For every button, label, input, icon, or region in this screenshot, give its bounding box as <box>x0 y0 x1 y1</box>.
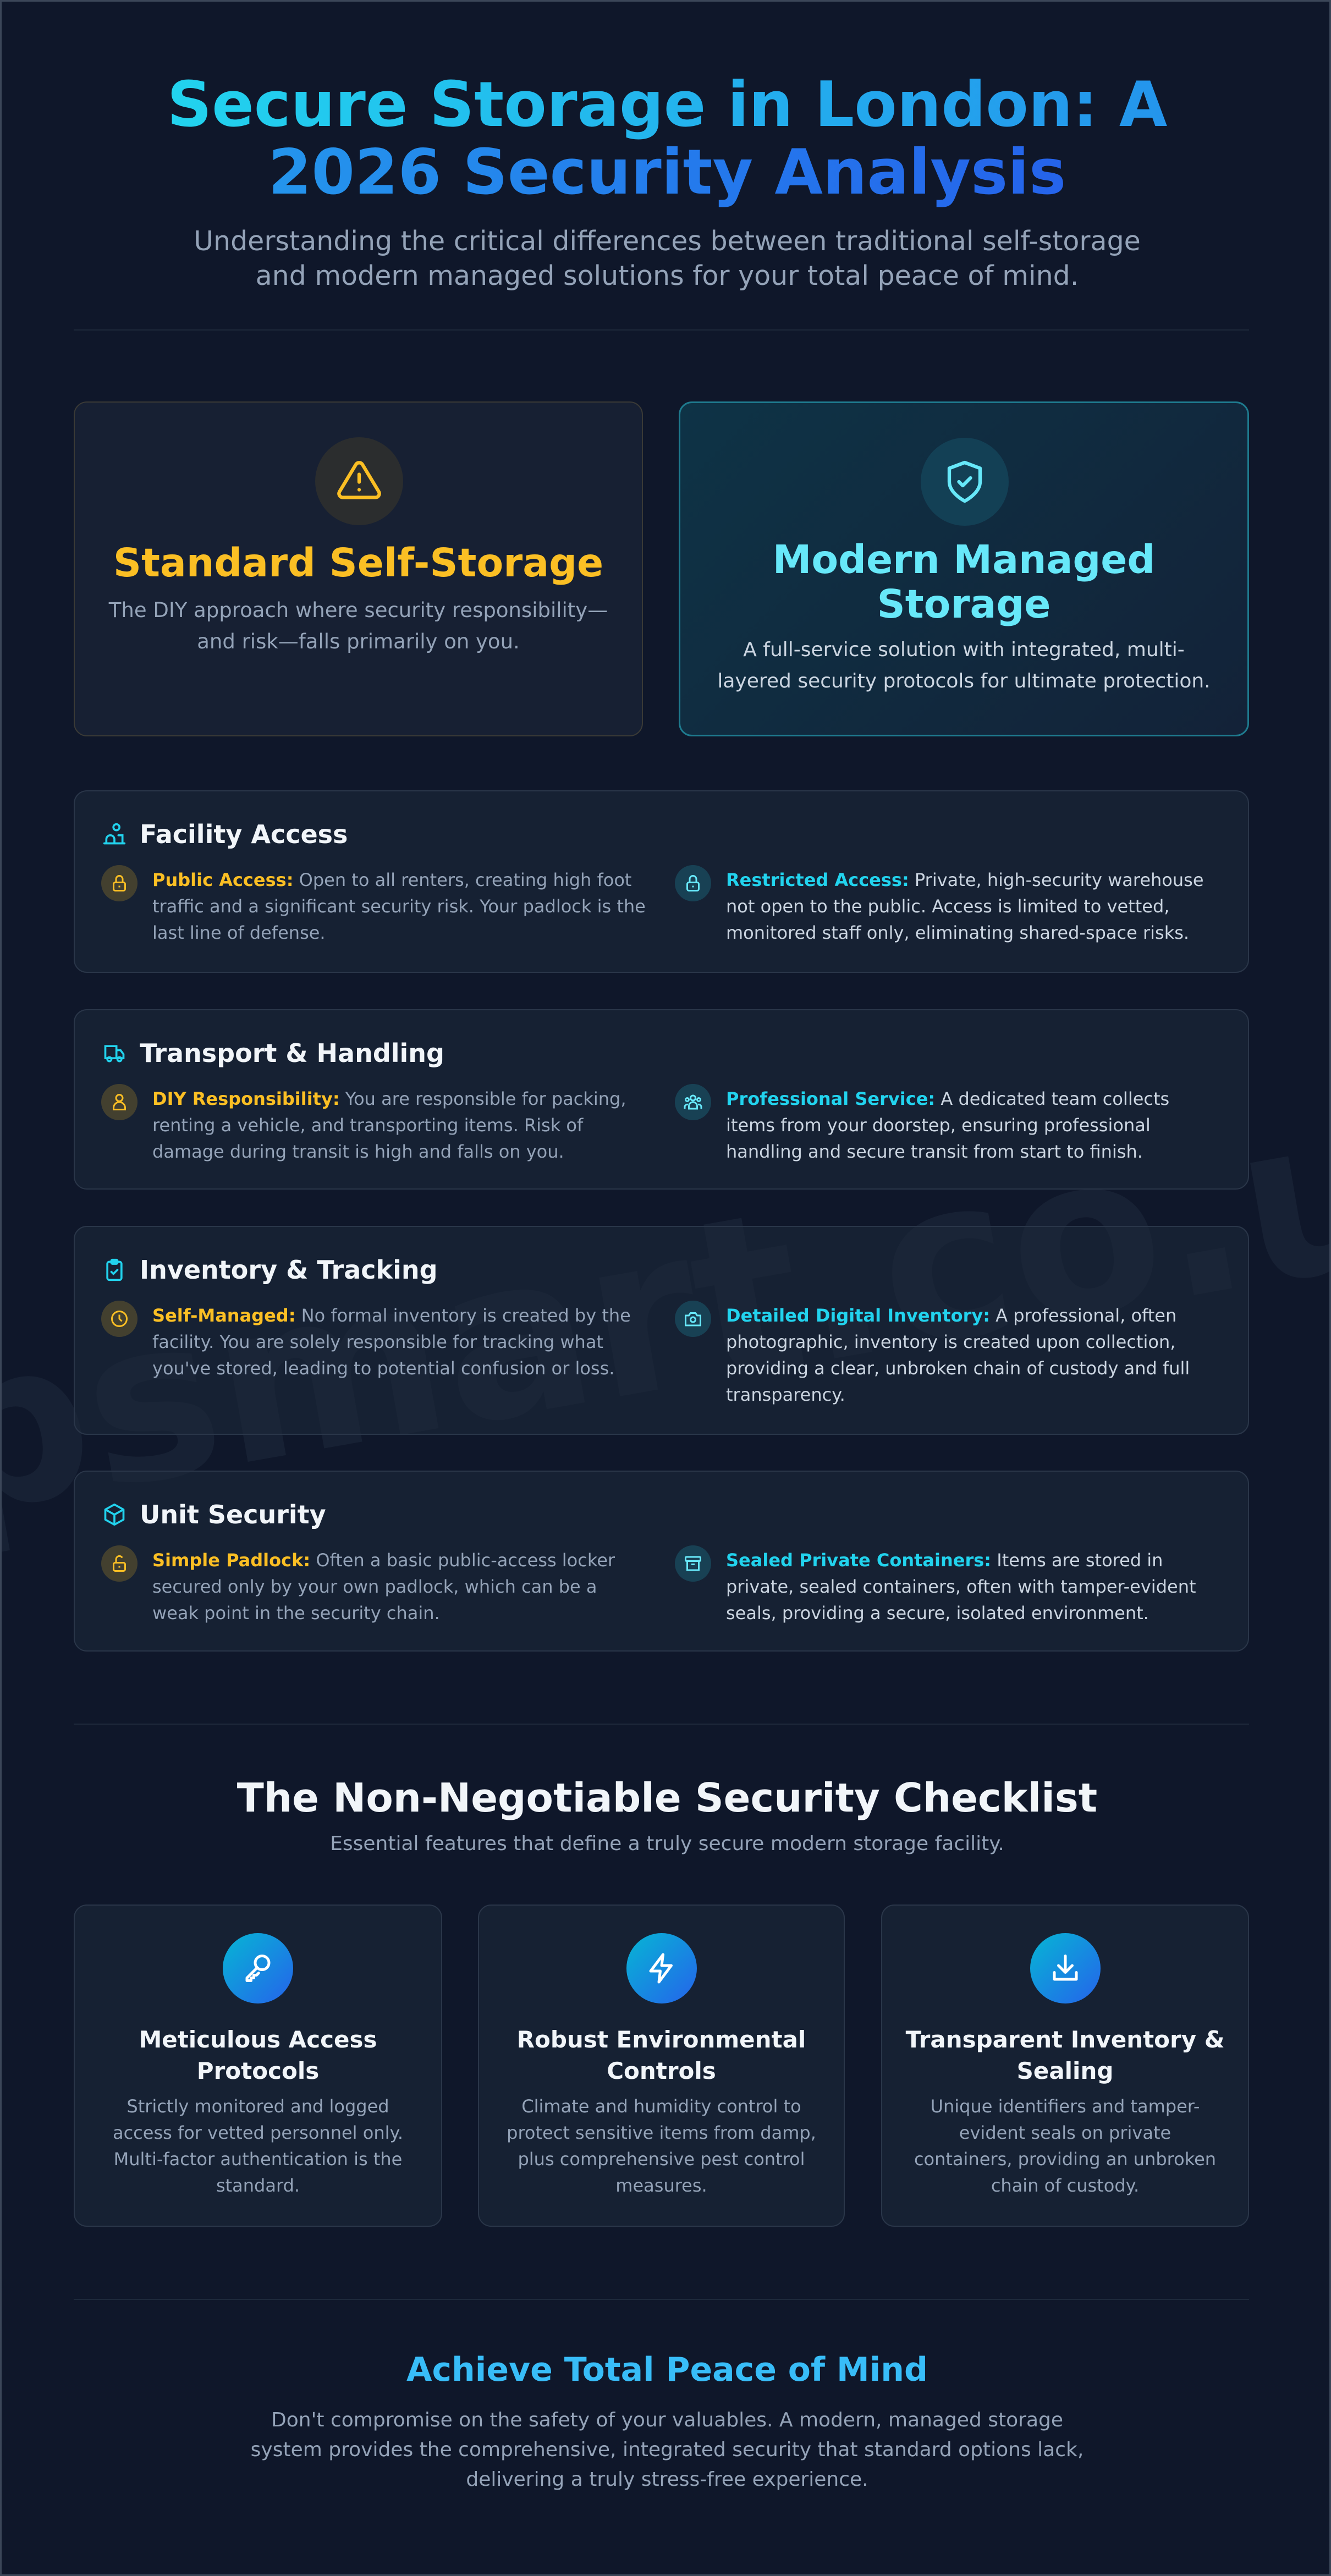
closing text: Don't compromise on the safety of your valuables. A modern, managed storage <box>271 2409 1063 2431</box>
icon: access <box>103 823 125 845</box>
card: inventory & sealing: Sealing <box>1017 2057 1113 2084</box>
panel: inventory & tracking: transparency. <box>726 1384 845 1405</box>
heading: Standard Self-Storage <box>113 540 603 586</box>
panel: inventory & tracking <box>74 1226 1249 1435</box>
card: environmental controls: Climate and humidity control to <box>521 2096 801 2117</box>
panel: unit security: secured only by your own padlock, which can be a <box>152 1576 597 1597</box>
card: inventory & sealing <box>881 1905 1249 2227</box>
icon: shield <box>921 438 1009 526</box>
description: layered security protocols for ultimate protection. <box>717 670 1211 692</box>
checklist subtitle: Essential features that define a truly secure modern storage facility. <box>330 1832 1004 1855</box>
card: access protocols: access for vetted personnel only. <box>113 2122 403 2143</box>
panel: inventory & tracking: you've stored, leading to potential confusion or loss. <box>152 1358 614 1379</box>
subtitle: Understanding the critical differences between traditional self-storage <box>194 225 1141 257</box>
closing text: system provides the comprehensive, integrated security that standard options lack, <box>251 2439 1084 2461</box>
card: inventory & sealing: containers, providing an unbroken <box>914 2149 1216 2170</box>
card: environmental controls: Robust Environmental <box>517 2026 806 2053</box>
panel: transport & handling <box>74 1009 1249 1190</box>
icon: download <box>1030 1933 1100 2003</box>
description: The DIY approach where security responsibility— <box>109 598 608 622</box>
panel: inventory & tracking: Self-Managed: No formal inventory is created by the <box>152 1305 631 1326</box>
icon: truck <box>105 1045 124 1063</box>
item: diy <box>101 1084 138 1120</box>
card: inventory & sealing: Transparent Inventory & <box>906 2026 1224 2053</box>
card: environmental controls: Controls <box>607 2057 716 2084</box>
icon: warning <box>315 437 403 525</box>
item: restricted access <box>675 865 711 901</box>
item: self-managed <box>101 1301 138 1337</box>
subtitle: and modern managed solutions for your total peace of mind. <box>256 260 1079 291</box>
panel: transport & handling: items from your doorstep, ensuring professional <box>726 1115 1151 1136</box>
card: inventory & sealing: Unique identifiers and tamper- <box>931 2096 1200 2117</box>
heading: Transport & Handling <box>140 1038 444 1068</box>
panel: inventory & tracking: facility. You are solely responsible for tracking what <box>152 1331 603 1352</box>
panel: facility access <box>74 790 1249 973</box>
panel: inventory & tracking: providing a clear, unbroken chain of custody and full <box>726 1358 1190 1379</box>
panel: facility access: monitored staff only, eliminating shared-space risks. <box>726 922 1189 943</box>
panel: standard self-storage <box>74 401 643 736</box>
panel: transport & handling: handling and secure transit from start to finish. <box>726 1141 1143 1162</box>
closing heading: Achieve Total Peace of Mind <box>406 2351 928 2389</box>
description: and risk—falls primarily on you. <box>197 630 520 653</box>
checklist heading: The Non-Negotiable Security Checklist <box>237 1775 1097 1821</box>
card: inventory & sealing: chain of custody. <box>991 2175 1139 2196</box>
heading <box>773 537 1155 627</box>
heading: Unit Security <box>140 1500 326 1529</box>
panel: unit security: seals, providing a secure, isolated environment. <box>726 1603 1149 1623</box>
panel: unit security: Sealed Private Containers: Items are stored in <box>726 1550 1163 1571</box>
panel: transport & handling: renting a vehicle, and transporting items. Risk of <box>152 1115 583 1136</box>
card: environmental controls <box>478 1905 845 2227</box>
title <box>167 68 1167 208</box>
subtitle <box>194 225 1141 291</box>
heading: Facility Access <box>140 819 348 849</box>
panel: facility access: traffic and a significant security risk. Your padlock is the <box>152 896 646 917</box>
card: inventory & sealing: evident seals on private <box>959 2122 1171 2143</box>
panel: unit security: weak point in the security chain. <box>152 1603 440 1623</box>
card: environmental controls: plus comprehensive pest control <box>518 2149 805 2170</box>
title: 2026 Security Analysis <box>268 136 1066 208</box>
title: Secure Storage in London: A <box>167 68 1167 141</box>
item: padlock <box>101 1545 138 1582</box>
item: public access <box>101 865 138 901</box>
card: access protocols: Meticulous Access <box>139 2026 377 2053</box>
panel: facility access: not open to the public. Access is limited to vetted, <box>726 896 1169 917</box>
panel: facility access: last line of defense. <box>152 922 326 943</box>
item: sealed containers <box>675 1545 711 1582</box>
icon: clipboard <box>106 1258 123 1281</box>
panel: facility access: Restricted Access: Private, high-security warehouse <box>726 869 1203 890</box>
panel: inventory & tracking: photographic, inventory is created upon collection, <box>726 1331 1175 1352</box>
card: environmental controls: measures. <box>615 2175 707 2196</box>
heading: Inventory & Tracking <box>140 1255 438 1285</box>
card: access protocols: Strictly monitored and logged <box>127 2096 389 2117</box>
description <box>109 598 608 653</box>
panel: facility access: Public Access: Open to all renters, creating high foot <box>152 869 631 890</box>
panel: modern managed storage <box>679 401 1249 736</box>
panel: unit security: Simple Padlock: Often a basic public-access locker <box>152 1550 615 1571</box>
heading: Modern Managed <box>773 537 1155 582</box>
card: access protocols: Multi-factor authentication is the <box>114 2149 402 2170</box>
panel: unit security: private, sealed containers, often with tamper-evident <box>726 1576 1196 1597</box>
heading: Storage <box>877 581 1050 627</box>
item: professional <box>675 1084 711 1120</box>
icon: box <box>105 1504 124 1526</box>
panel: transport & handling: damage during transit is high and falls on you. <box>152 1141 564 1162</box>
item: digital inventory <box>675 1301 711 1337</box>
card: access protocols: Protocols <box>197 2057 319 2084</box>
card: environmental controls: protect sensitive items from damp, <box>507 2122 816 2143</box>
card: access protocols <box>74 1905 442 2227</box>
icon: bolt <box>626 1933 696 2003</box>
card: access protocols: standard. <box>216 2175 300 2196</box>
description <box>717 639 1211 692</box>
description: A full-service solution with integrated, multi- <box>743 639 1185 661</box>
closing text: delivering a truly stress-free experience. <box>466 2468 868 2491</box>
icon: key <box>223 1933 293 2003</box>
panel: inventory & tracking: Detailed Digital Inventory: A professional, often <box>726 1305 1176 1326</box>
panel: unit security <box>74 1471 1249 1652</box>
closing text <box>251 2409 1084 2491</box>
panel: transport & handling: DIY Responsibility: You are responsible for packing, <box>152 1088 626 1109</box>
panel: transport & handling: Professional Service: A dedicated team collects <box>726 1088 1169 1109</box>
